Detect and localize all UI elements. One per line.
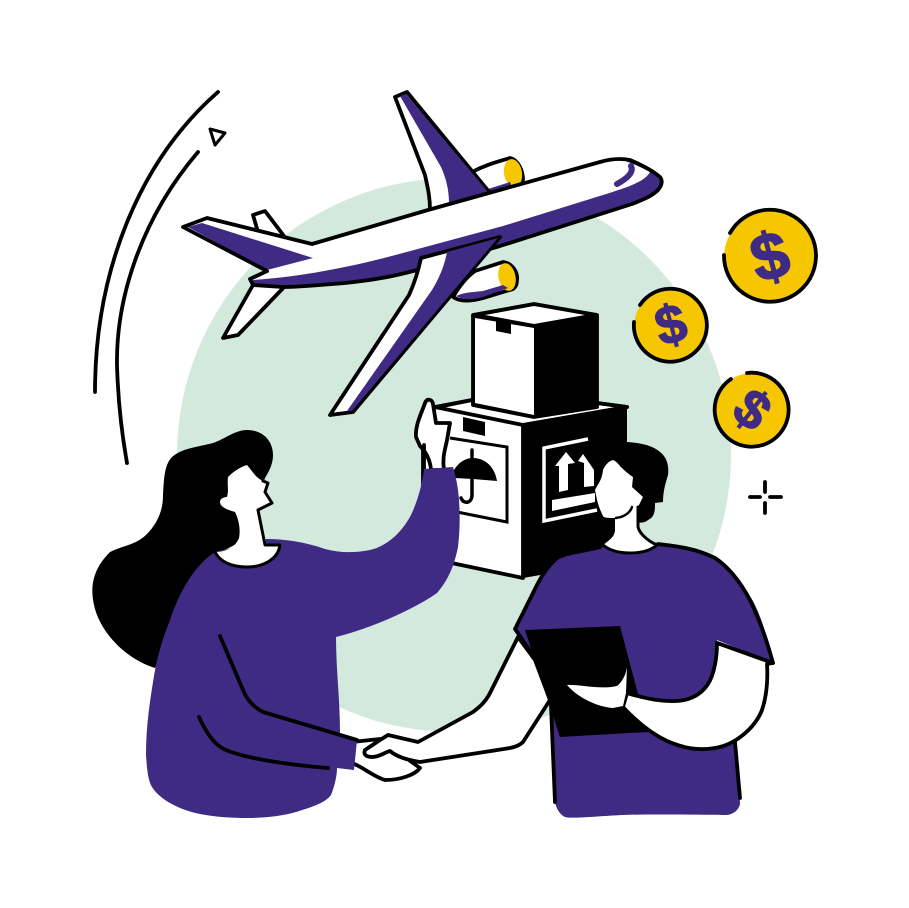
sweater — [146, 467, 460, 818]
coin: medium — [634, 288, 708, 362]
tape — [496, 320, 511, 334]
fragile label with umbrella — [450, 438, 507, 522]
boxes stack — [423, 304, 627, 578]
motion arcs — [95, 92, 218, 463]
hand on clipboard — [567, 667, 627, 708]
raised hand — [416, 400, 450, 470]
fuselage — [250, 159, 662, 287]
airplane — [183, 92, 662, 415]
extended arm — [364, 637, 550, 762]
lower engine — [453, 262, 518, 300]
sleeve creases — [199, 636, 357, 768]
upper wing — [395, 92, 490, 210]
bottom box — [423, 400, 627, 578]
tape — [463, 417, 485, 436]
this side up label — [544, 439, 597, 521]
lower wing — [330, 237, 500, 415]
icon: small triangle — [210, 129, 225, 145]
coin: lower: $ — [722, 377, 782, 443]
background circle — [177, 178, 731, 732]
coin: large — [724, 210, 816, 303]
t-shirt — [515, 544, 773, 818]
profile line — [215, 481, 280, 567]
lower tail wing — [223, 283, 288, 338]
man — [364, 442, 773, 818]
upper engine — [470, 158, 524, 195]
woman — [92, 400, 460, 818]
coin: medium: $ — [649, 292, 693, 358]
t-shirt outline — [515, 544, 773, 802]
neck and collar line — [603, 507, 657, 553]
hair — [610, 442, 668, 523]
coin: large: $ — [742, 216, 797, 297]
hair — [92, 430, 273, 668]
jaw line — [616, 507, 632, 518]
icon: sparkle — [750, 482, 781, 513]
holding arm — [623, 643, 773, 749]
far tail fin — [253, 211, 287, 240]
shaking hand — [352, 739, 420, 780]
face — [595, 460, 657, 553]
clipboard — [525, 626, 648, 737]
horizontal stabiliser — [183, 218, 313, 271]
top box — [473, 304, 597, 417]
face and neck — [215, 465, 280, 567]
